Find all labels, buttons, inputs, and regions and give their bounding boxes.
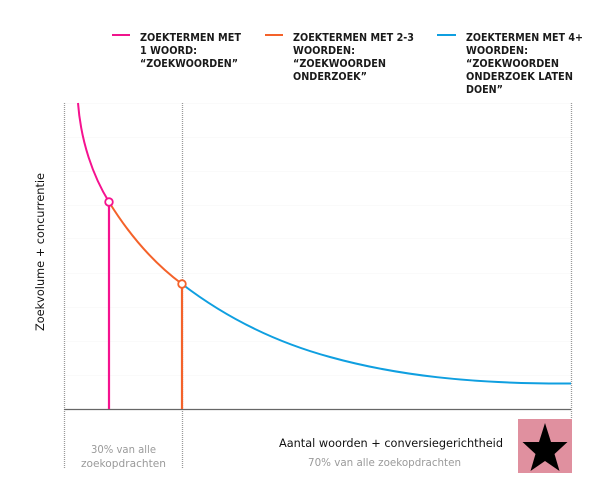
legend: 2-3 words: WOORDEN: [293,45,355,57]
curve: blue segment [182,284,571,384]
legend: 4+ words: “ZOEKWOORDEN [466,58,559,70]
orange marker [178,280,186,288]
legend: 4+ words: ZOEKTERMEN MET 4+ [466,32,583,44]
legend: 2-3 words: “ZOEKWOORDEN [293,58,386,70]
pink drop line [108,202,110,409]
x axis label: Aantal woorden + conversiegerichtheid [279,436,503,450]
gridlines [64,104,571,376]
legend: 4+ words [437,32,583,96]
30 percent label [81,444,166,470]
legend: 2-3 words: ZOEKTERMEN MET 2-3 [293,32,414,44]
x axis [64,408,571,410]
legend: 2-3 words [265,32,414,83]
legend: 4+ words: ONDERZOEK LATEN [466,71,573,83]
legend: 1 word [112,32,242,70]
legend: 1 word: 1 WOORD: [140,45,197,57]
legend: 1 word: “ZOEKWOORDEN” [140,58,238,70]
30 percent label: 30% van alle [91,444,156,456]
dotted guide lines [64,103,572,468]
legend: 2-3 words: ONDERZOEK” [293,71,367,83]
legend: 4+ words: DOEN” [466,84,503,96]
curve: orange segment [109,202,182,284]
legend: 1 word: ZOEKTERMEN MET [140,32,242,44]
y axis label: Zoekvolume + concurrentie [33,173,47,331]
pink marker [105,198,113,206]
icon: star badge [518,419,572,473]
70 percent label: 70% van alle zoekopdrachten [308,457,461,469]
orange drop line [181,284,183,409]
curve: pink segment [78,103,109,202]
30 percent label: zoekopdrachten [81,458,166,470]
legend: 4+ words: WOORDEN: [466,45,528,57]
